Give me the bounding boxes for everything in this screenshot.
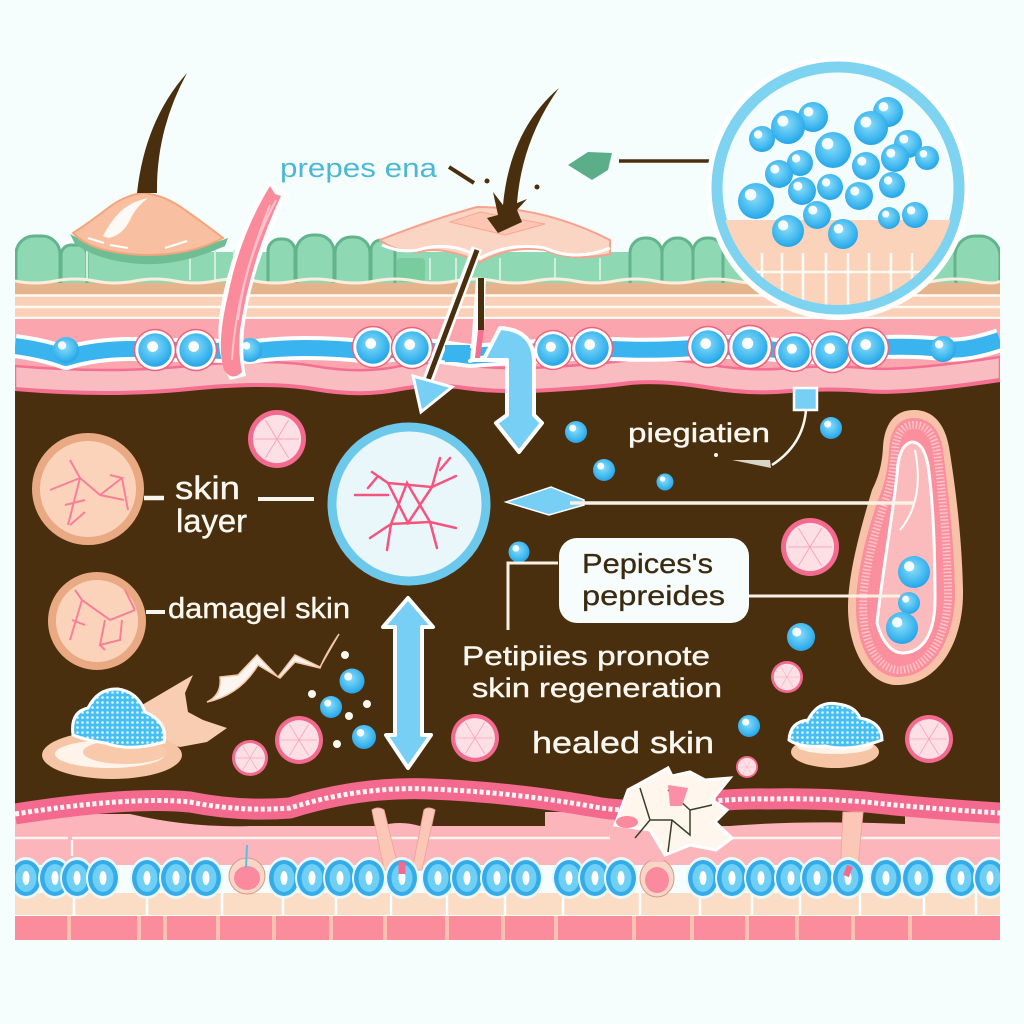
icon: skin layer cell circle [36, 437, 140, 541]
peach skin block with grid [726, 220, 950, 305]
gland peptides [886, 556, 930, 644]
magnified view of peptides [706, 56, 970, 320]
icon: left skin pad with blue patch [42, 675, 227, 779]
dermal cell outline [15, 838, 1000, 856]
connector: skin layer left [144, 496, 164, 500]
bottom pink striped layer [15, 916, 1000, 940]
icon: damaged skin circle [52, 576, 142, 666]
arrow: vertical double-headed blue arrow [383, 598, 433, 768]
icon: right skin pad with blue patch [789, 703, 882, 768]
icon: pink hair follicle [218, 182, 290, 380]
pink dermis band [15, 319, 1000, 369]
connector: peptides box [508, 563, 900, 630]
icon: small pink cells [232, 410, 953, 778]
wavy blue capillary [15, 340, 1000, 358]
arrow: thin dark arrow with blue head [413, 248, 477, 412]
tan and peach stripes [15, 279, 1000, 319]
callout: peptides label box: Pepices's [582, 548, 713, 579]
arrow: blue bent arrow downward [445, 278, 542, 452]
text: damaged skin: damagel skin [168, 593, 350, 625]
text: skin layer [175, 470, 247, 539]
icon: raised skin mound with hair [70, 73, 228, 264]
capillary blood cells [53, 325, 956, 373]
peach tubes [372, 808, 864, 870]
callout: peptides label box: pepreides [582, 580, 725, 611]
icon: damaged skin flap [380, 207, 610, 262]
text: skin layer: layer [176, 503, 247, 539]
text: healed skin: healed skin [532, 725, 714, 760]
pale pink lower dermis [15, 812, 1000, 865]
arrow: long pointer into central cell [506, 487, 915, 515]
icon: peptide gland organ [848, 410, 963, 685]
text: skin layer: skin [175, 470, 240, 506]
text: piegiatien: piegiatien [628, 418, 770, 448]
row of blue cells [9, 857, 1007, 899]
icon: central blue cell with pink network [332, 427, 486, 581]
connector: damaged skin [146, 610, 165, 614]
arrow: curved pointer from blue tab [714, 388, 817, 468]
icon: large dark arrow into skin [487, 88, 559, 233]
text: peptides promote skin regeneration: Petipiies pronote [462, 641, 710, 671]
green epidermis cells [15, 234, 1000, 283]
text: peptides promote skin regeneration [462, 641, 722, 703]
peach base cells [15, 893, 1000, 915]
text: peptides promote skin regeneration: skin regeneration [472, 673, 722, 703]
panel: lower skin layers [9, 789, 1007, 940]
lower membrane band [15, 789, 1000, 814]
label leader: dash and dots [449, 167, 540, 190]
callout: peptides label box [559, 538, 749, 623]
panel: upper skin layers [15, 235, 1000, 410]
text: prepes ena label: prepes ena [280, 153, 438, 183]
arrow: green arrow with leader [568, 152, 710, 180]
peptide spheres [738, 97, 939, 249]
icon: white crack zigzag [207, 634, 339, 702]
pink follicle cells in row [229, 845, 850, 897]
panel: dark dermis [15, 380, 1000, 830]
connector: skin layer right [258, 497, 314, 501]
lower dermis texture band [15, 356, 1000, 392]
icon: free blue peptides and dots [308, 417, 842, 749]
icon: cracked cell cluster [615, 768, 732, 862]
